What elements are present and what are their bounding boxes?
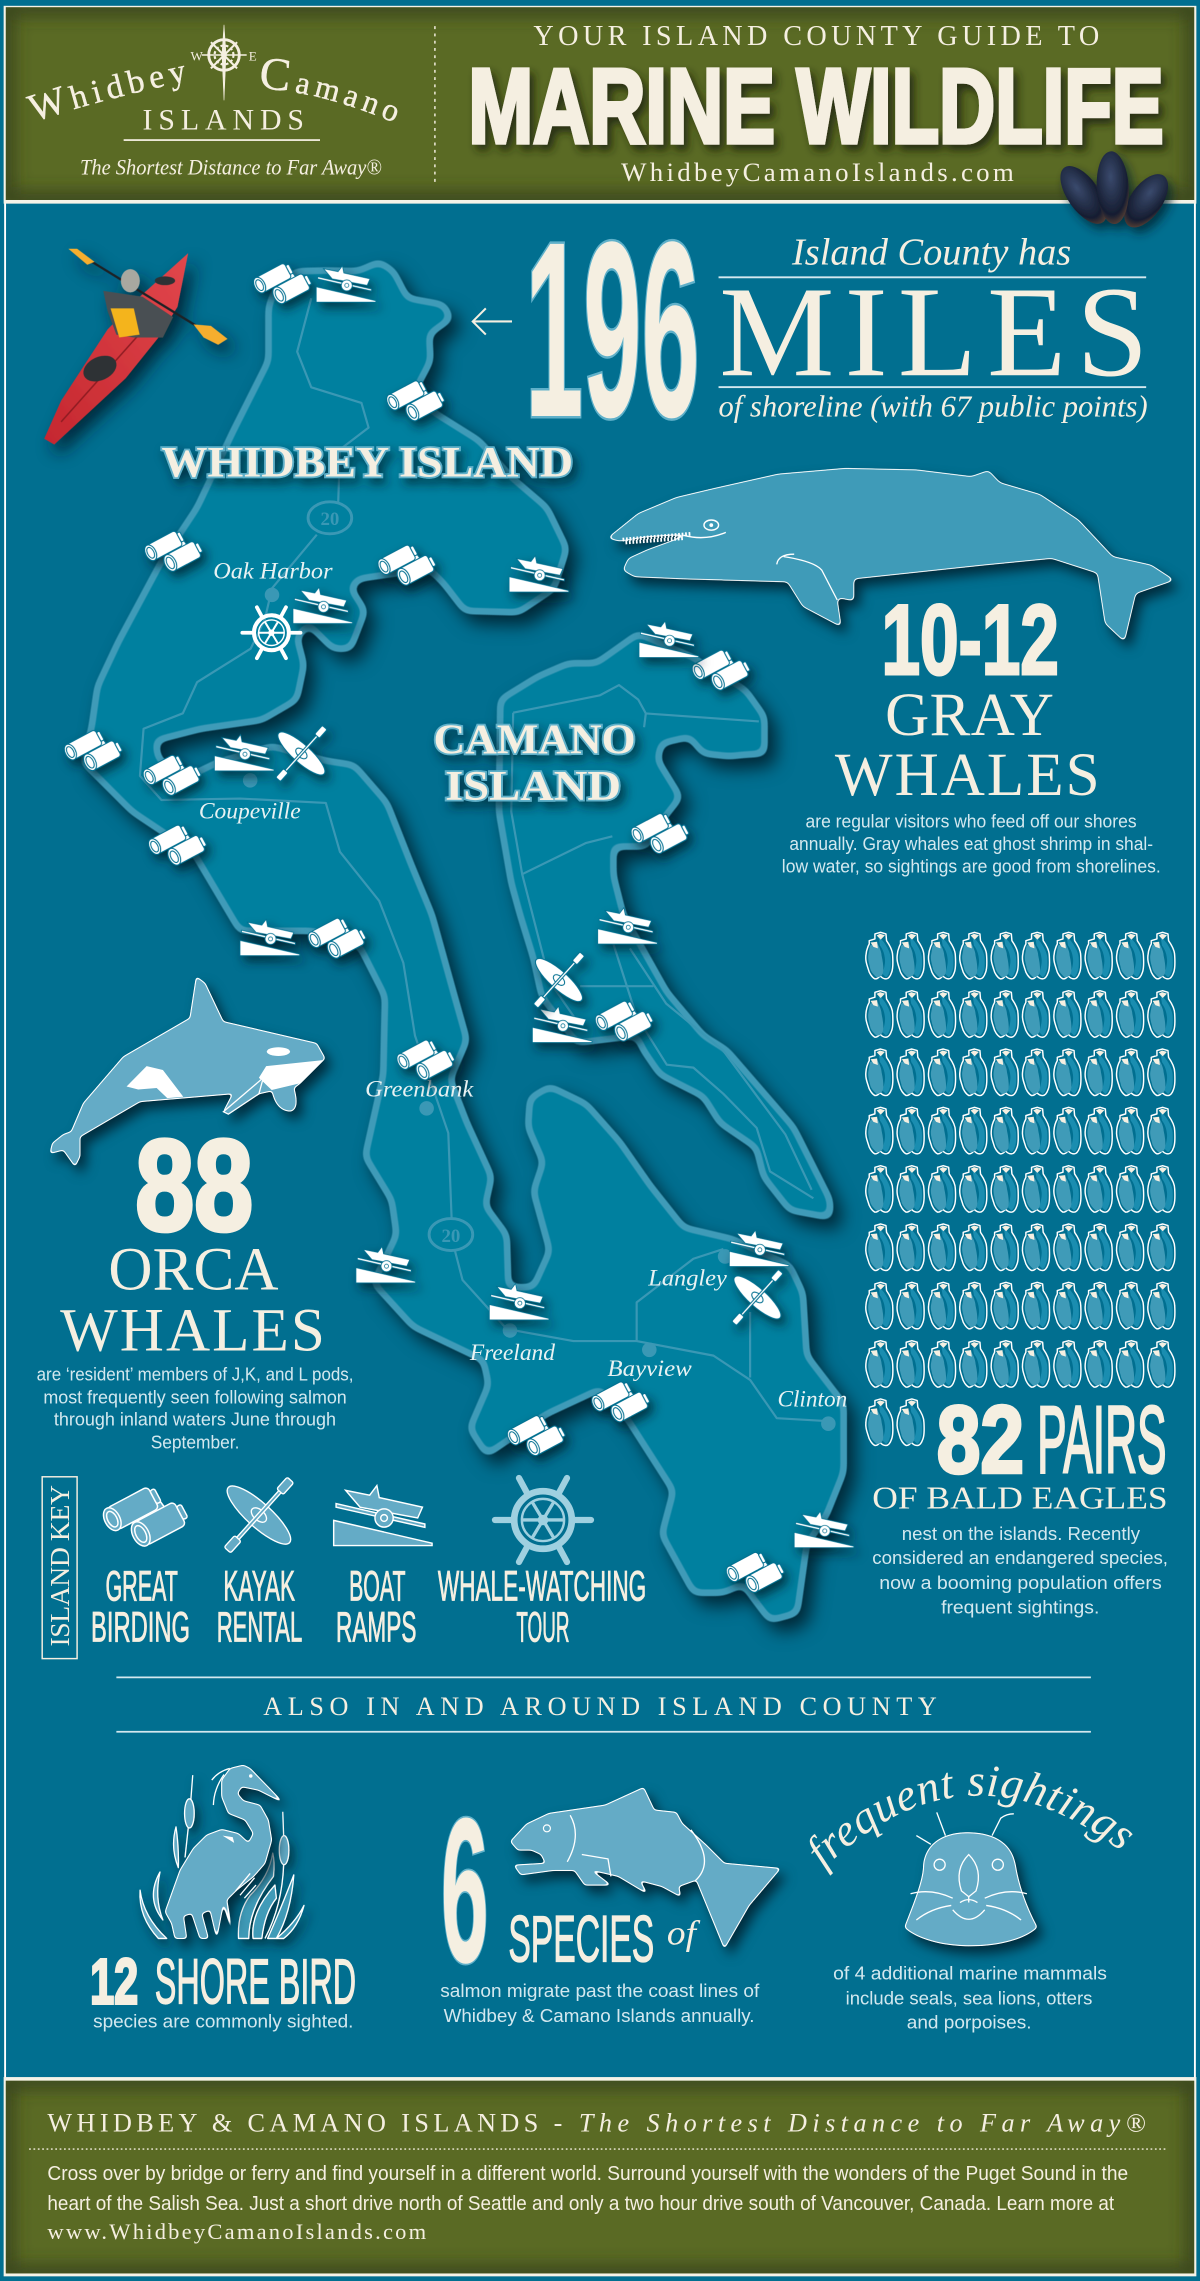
icon: salmon: [510, 1787, 781, 1948]
callout: 196 miles: [473, 191, 1148, 470]
of: of: [667, 1914, 701, 1953]
footer paragraph: Cross over by bridge or ferry and find yourself in a different world. Surround yourself with the wonders of the Puget Sound in the: [47, 2163, 1128, 2185]
SPECIES: SPECIES: [508, 1903, 654, 1976]
description: most frequently seen following salmon: [43, 1387, 347, 1408]
section heading: also in and around: ALSO IN AND AROUND ISLAND COUNTY: [263, 1692, 937, 1721]
arrow: [473, 308, 512, 335]
description: Whidbey & Camano Islands annually.: [444, 2006, 754, 2027]
kayak hull: [44, 253, 188, 445]
icon: gray whale: [608, 468, 1174, 641]
SHORE BIRD: SHORE BIRD: [155, 1945, 356, 2017]
footer heading: The Shortest Distance to Far Away®: [579, 2109, 1146, 2138]
label: Camano Island: CAMANO: [433, 716, 636, 763]
icon: seal: [905, 1812, 1037, 1946]
stat: 82: 82: [937, 1386, 1024, 1493]
label: Camano Island: [433, 716, 636, 810]
description: now a booming population offers: [879, 1573, 1162, 1594]
footer paragraph: heart of the Salish Sea. Just a short drive north of Seattle and only a two hour drive south of Vancouver, Canada. Learn more at: [47, 2193, 1114, 2215]
panel: gray whales: [608, 468, 1174, 877]
icon: orca: [50, 977, 325, 1167]
heading: WHALES: [835, 742, 1100, 809]
key: kayak rental: RENTAL: [217, 1604, 302, 1651]
heading: [60, 1236, 325, 1365]
intro: Island County has: [791, 232, 1071, 274]
panel: shore birds: [90, 1765, 356, 2033]
header kicker: YOUR ISLAND COUNTY GUIDE TO: [533, 21, 1099, 52]
key: boat ramps: RAMPS: [336, 1604, 416, 1651]
description: [440, 1981, 760, 2027]
website: WhidbeyCamanoIslands.com: [621, 157, 1014, 187]
logo word: Islands: ISLANDS: [143, 103, 304, 136]
highway marker north: [308, 502, 352, 534]
description: low water, so sightings are good from shorelines.: [782, 857, 1161, 877]
panel: bald eagles: [866, 932, 1175, 1618]
key label: ISLAND KEY: [44, 1485, 75, 1647]
dotted divider: [434, 26, 436, 183]
town labels: Bayview: [607, 1356, 692, 1382]
sub-heading: OF BALD EAGLES: [872, 1479, 1168, 1515]
town labels: Langley: [647, 1265, 728, 1291]
tagline: The Shortest Distance to Far Away®: [80, 155, 382, 180]
description: frequent sightings.: [941, 1597, 1099, 1618]
curved heading: frequent sightings: [810, 1766, 1133, 1876]
description: [833, 1964, 1107, 2033]
panel: marine mammals: [810, 1766, 1133, 2033]
panel: salmon: 6: [441, 1775, 489, 2006]
eagle pictogram grid: [866, 932, 1175, 1446]
heading: GRAY: [885, 682, 1054, 749]
description: annually. Gray whales eat ghost shrimp in shal-: [789, 834, 1153, 854]
stat: 88: 88: [135, 1114, 253, 1258]
town dots: [243, 588, 836, 1431]
description: are regular visitors who feed off our shores: [806, 812, 1137, 832]
heading: [835, 682, 1100, 809]
key: kayak rental: KAYAK: [223, 1563, 295, 1610]
label: Camano Island: ISLAND: [445, 763, 621, 810]
description: nest on the islands. Recently: [902, 1524, 1141, 1545]
description: salmon migrate past the coast lines of: [440, 1981, 760, 2002]
footer heading: WHIDBEY & CAMANO ISLANDS -: [47, 2109, 562, 2138]
key: boat ramps: BOAT: [349, 1563, 406, 1610]
description: of 4 additional marine mammals: [833, 1964, 1107, 1985]
logo word: Camano: [259, 89, 429, 138]
paddler: [103, 291, 173, 337]
description: and porpoises.: [907, 2012, 1032, 2033]
key: whale-watching tour: WHALE-WATCHING: [438, 1563, 646, 1610]
key: great birding: [91, 1484, 190, 1651]
key: boat ramps: [334, 1486, 432, 1651]
map icon: whale-watching wheel: [242, 607, 301, 658]
icon: compass rose: [202, 25, 247, 100]
description: [782, 812, 1161, 877]
description: through inland waters June through: [54, 1409, 336, 1430]
MILES: MILES: [719, 261, 1148, 404]
Whidbey Island: [83, 262, 844, 1620]
description: [37, 1364, 353, 1453]
callout: 196 miles: 196: [525, 191, 700, 470]
road network: [140, 298, 827, 1421]
paddle blades: [68, 249, 227, 345]
key: whale-watching tour: TOUR: [516, 1604, 569, 1651]
highway marker south: 20: [441, 1226, 460, 1247]
town labels: Clinton: [777, 1387, 847, 1413]
panel: footer: [4, 2077, 1196, 2276]
shoreline note: of shoreline (with 67 public points): [719, 390, 1148, 424]
description: are ‘resident’ members of J,K, and L pods,: [37, 1364, 353, 1385]
town labels: Greenbank: [365, 1076, 474, 1102]
key: whale-watching tour: [438, 1478, 646, 1651]
town labels: Coupeville: [199, 798, 301, 824]
stat: 12: 12: [90, 1945, 138, 2017]
icon: mussels: [1051, 150, 1177, 235]
footer paragraph: www.WhidbeyCamanoIslands.com: [47, 2219, 427, 2244]
logo rule: [124, 139, 320, 141]
heading: WHALES: [60, 1298, 325, 1365]
logo word: Whidbey: [33, 70, 240, 122]
town labels: Oak Harbor: [213, 558, 333, 584]
highway marker south: [429, 1219, 473, 1251]
stat: 10-12: 10-12: [881, 584, 1059, 695]
logo: [25, 24, 398, 180]
compass letters: W: [191, 48, 204, 63]
panel: orca whales: [37, 977, 353, 1453]
description: include seals, sea lions, otters: [846, 1988, 1092, 2009]
panel: header: [4, 6, 1196, 204]
logo: Whidbey: [25, 66, 184, 120]
map icons: binoculars: [62, 261, 786, 1595]
description: [872, 1524, 1168, 1618]
footer heading: [47, 2109, 1146, 2138]
kayaker photo: [44, 249, 227, 445]
map icons: boat ramps: [214, 266, 854, 1548]
Camano Island: [499, 633, 830, 1217]
key: great birding: GREAT: [105, 1563, 178, 1610]
compass letters: [191, 48, 257, 63]
paddle: [87, 259, 196, 326]
logo: Camano: [261, 58, 398, 121]
footer paragraph: [47, 2163, 1128, 2244]
heading: ORCA: [108, 1236, 279, 1303]
highway marker north: 20: [320, 509, 339, 530]
panel: island key: [42, 1477, 646, 1659]
description: considered an endangered species,: [872, 1548, 1168, 1569]
panel: salmon: [440, 1775, 781, 2027]
town labels: Freeland: [469, 1340, 555, 1366]
label: Whidbey Island: WHIDBEY ISLAND: [161, 439, 573, 487]
description: species are commonly sighted.: [93, 2012, 353, 2033]
icon: heron and reeds: [140, 1765, 304, 1938]
town labels: [199, 558, 847, 1413]
compass letters: E: [249, 48, 257, 63]
key: great birding: BIRDING: [91, 1604, 190, 1651]
map icons: kayaks: [273, 725, 786, 1326]
map: islands: [62, 261, 854, 1620]
description: September.: [151, 1432, 239, 1453]
hatches: [79, 351, 121, 387]
key: kayak rental: [217, 1477, 302, 1651]
